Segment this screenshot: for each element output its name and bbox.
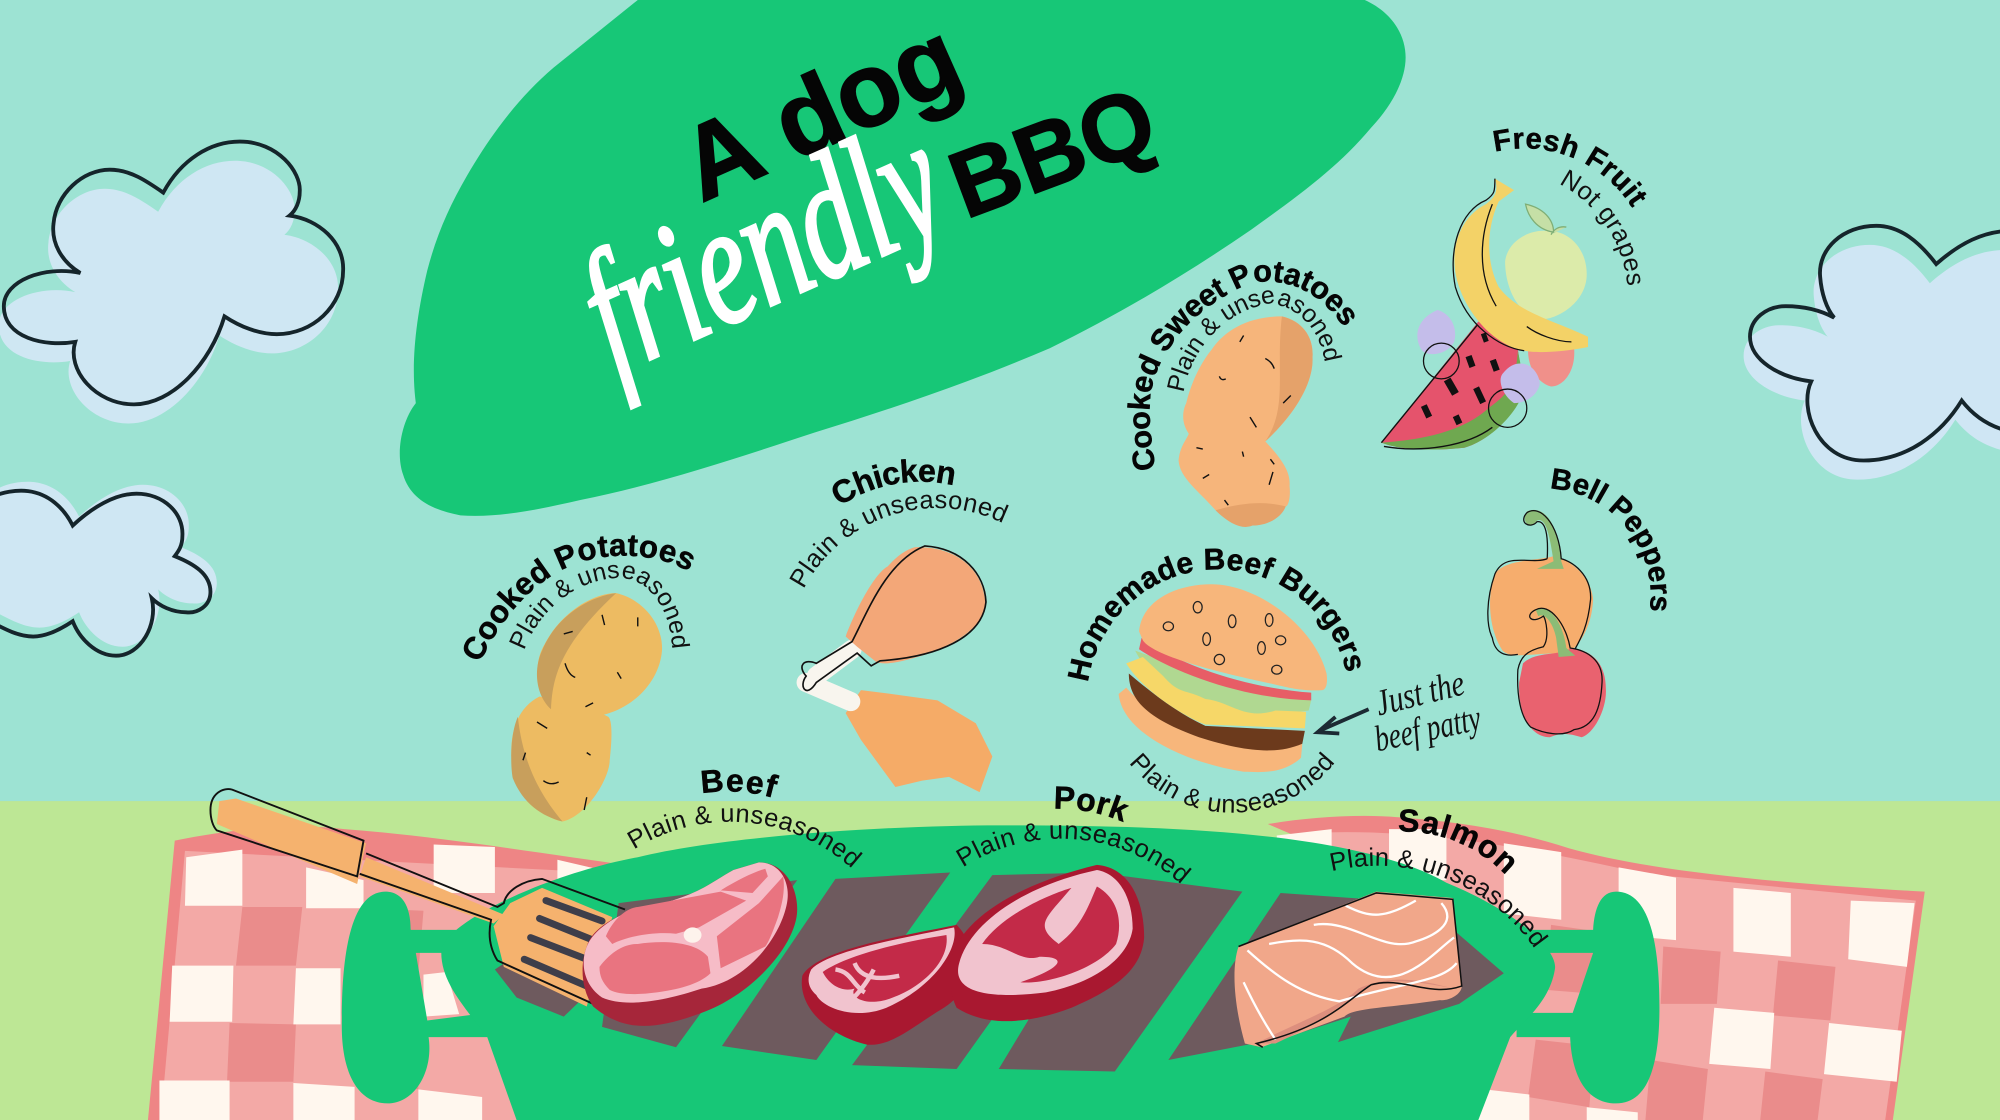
title: BBQ — [936, 67, 1169, 239]
lettuce — [1135, 651, 1311, 716]
label: bell peppers: Bell Peppers — [1551, 468, 1667, 611]
label: cooked potatoes: Cooked Potatoes — [464, 535, 694, 659]
left handle — [342, 892, 487, 1103]
leaf — [1526, 204, 1566, 235]
berries — [1417, 310, 1540, 403]
bell peppers — [1488, 510, 1606, 737]
title — [552, 0, 1169, 410]
sweet potato — [1179, 316, 1313, 527]
cloud: lower left — [0, 482, 217, 656]
bottom bun — [1119, 688, 1302, 772]
label: beef: Beef — [701, 770, 780, 798]
tablecloth: right — [1268, 816, 1925, 1120]
patty — [1129, 674, 1305, 750]
arrow to patty — [1318, 709, 1369, 733]
tablecloth: left — [148, 827, 644, 1120]
sesame seeds — [1163, 601, 1286, 674]
pork slice: left — [802, 925, 972, 1045]
note: salmon: Plain & unseasoned — [1330, 847, 1549, 948]
tomato — [1139, 638, 1311, 700]
strawberry — [1528, 347, 1574, 387]
pork slice: right — [950, 865, 1144, 1021]
note: burgers: Plain & unseasoned — [1130, 752, 1334, 813]
note: chicken: Plain & unseasoned — [789, 494, 1009, 588]
label: fresh fruit: Fresh Fruit — [1493, 128, 1646, 208]
grass background — [0, 801, 2000, 1120]
fresh fruit group — [1381, 179, 1588, 450]
grill — [342, 825, 1659, 1120]
grill slots — [495, 873, 1504, 1072]
title blob — [400, 0, 1406, 516]
grill body — [441, 825, 1555, 1120]
label: homemade beef burgers: Homemade Beef Burgers — [1068, 548, 1361, 681]
cloud: right — [1744, 226, 2000, 480]
cloud: upper left — [0, 142, 343, 424]
cheese — [1126, 657, 1306, 728]
handwritten note: Just the — [1371, 663, 1469, 724]
handwritten note: beef patty — [1371, 698, 1485, 760]
label: pork: Pork — [1055, 786, 1130, 822]
handwritten note — [1371, 663, 1485, 760]
sky background — [0, 0, 2000, 801]
title: friendly — [552, 83, 972, 410]
note: cooked potatoes: Plain & unseasoned — [509, 564, 690, 649]
note: beef: Plain & unseasoned — [627, 806, 863, 868]
burger — [1119, 584, 1327, 772]
beef steak — [583, 862, 797, 1026]
top bun — [1139, 584, 1327, 690]
label: chicken: Chicken — [832, 459, 954, 502]
potato — [511, 593, 662, 822]
banana — [1454, 179, 1588, 352]
note: pork: Plain & unseasoned — [956, 823, 1192, 884]
label: salmon: Salmon — [1398, 809, 1514, 874]
apple — [1505, 231, 1587, 319]
salmon — [1234, 892, 1462, 1047]
fork — [210, 789, 625, 1006]
label: cooked sweet potatoes: Cooked Sweet Potatoes — [1127, 262, 1355, 470]
note: cooked sweet potatoes: Plain & unseasoned — [1167, 290, 1342, 391]
note: fresh fruit: Not grapes — [1560, 170, 1640, 285]
chicken drumstick — [802, 546, 992, 792]
right handle — [1517, 892, 1659, 1103]
title: A dog — [663, 0, 978, 224]
watermelon — [1381, 321, 1523, 450]
